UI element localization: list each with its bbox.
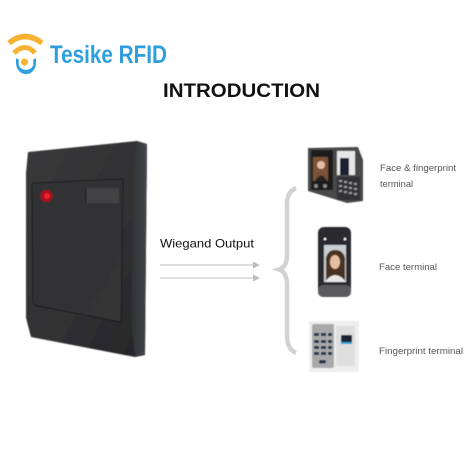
label: Wiegand Output: Wiegand Output xyxy=(160,236,255,250)
RFID reader device xyxy=(26,141,147,357)
label: fingerprint terminal: Fingerprint terminal xyxy=(379,346,463,356)
label: face and fingerprint terminal xyxy=(380,163,456,189)
arrow 1 xyxy=(160,262,260,268)
icon: face terminal xyxy=(318,227,351,297)
logo text: Tesike RFID xyxy=(50,41,167,69)
arrow 2 xyxy=(160,274,260,282)
label: face terminal: Face terminal xyxy=(379,262,437,272)
title: INTRODUCTION xyxy=(163,81,320,102)
icon: wifi logo xyxy=(9,36,42,74)
brace xyxy=(279,188,296,353)
label: face and fingerprint terminal: Face & fingerprint xyxy=(380,163,456,173)
LED xyxy=(40,190,52,202)
icon: fingerprint terminal xyxy=(309,321,359,372)
window xyxy=(85,188,119,203)
label: face and fingerprint terminal: terminal xyxy=(380,179,413,189)
icon: face and fingerprint terminal xyxy=(308,147,363,203)
